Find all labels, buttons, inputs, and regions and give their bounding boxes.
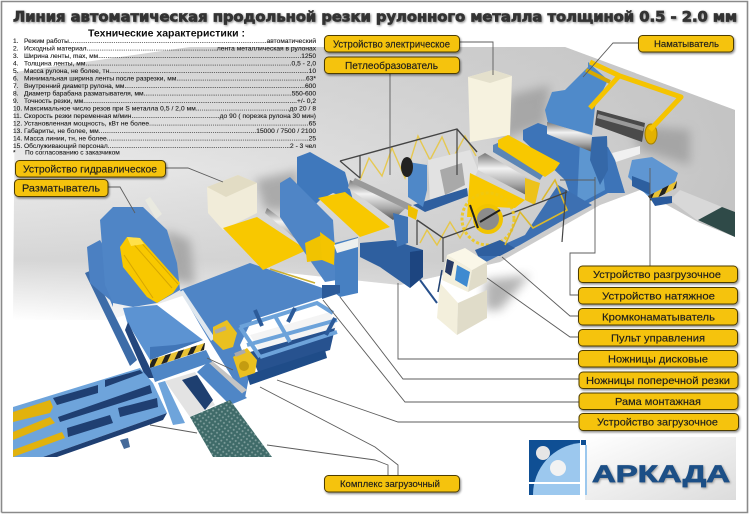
specifications table: 7. [13, 83, 19, 90]
specifications table: Внутренний диаметр рулона, мм..................................................................................................600 [24, 82, 316, 90]
label: unloading device: Устройство разгрузочное [593, 269, 721, 281]
label: cross-cut shears: Ножницы поперечной резки [586, 375, 730, 387]
label: decoiler: Разматыватель [22, 182, 101, 194]
transverse shears [207, 175, 358, 299]
label: disc shears: Ножницы дисковые [608, 354, 708, 366]
leader lines [108, 42, 650, 475]
edge scrap winder and rear slitter [462, 135, 592, 264]
floor shadows [165, 85, 690, 310]
specifications table: Масса линии, тн, не более...........................................................................................................25 [24, 134, 316, 142]
label: edge winder: Кромконаматыватель [602, 312, 716, 324]
specifications table: Максимальное число резов при S металла 0,5 / 2,0 мм.................................................до 20 / 8 [24, 106, 316, 112]
control console [420, 248, 487, 335]
label: recoiler: Наматыватель [654, 39, 719, 50]
floor [13, 47, 735, 320]
specifications table: 10. [13, 106, 22, 112]
label: control panel: Пульт управления [611, 332, 705, 344]
label: loading device [579, 414, 738, 430]
central blue decoiler post [401, 157, 468, 212]
title: Линия автоматическая продольной резки рулонного металла толщиной 0.5 - 2.0 мм [13, 8, 737, 26]
loading platform [123, 305, 247, 425]
label: electrical device: Устройство электрическое [333, 38, 450, 50]
blue floor platform [180, 263, 337, 401]
specifications table: Установленная мощность, кВт не более...................................................................................65 [24, 120, 316, 128]
specifications table: * [13, 150, 16, 156]
specifications table: 13. [13, 128, 22, 135]
specifications table: 1. [13, 38, 19, 45]
label: loading complex: Комплекс загрузочный [340, 479, 440, 490]
specifications table: 8. [13, 90, 19, 98]
label: hydraulic device: Устройство гидравлическое [23, 164, 157, 176]
specifications table: 4. [13, 60, 19, 68]
specifications table [13, 28, 317, 156]
chequer plate [190, 400, 272, 457]
label: edge winder [578, 308, 738, 325]
label: disc shears [578, 350, 738, 367]
label: loop former: Петлеобразователь [345, 60, 439, 72]
logo wordmark: АРКАДА [592, 461, 730, 488]
specifications table: 5. [13, 68, 19, 75]
specifications table: Толщина ленты, мм..............................................................................................................0,5 - 2,0 [24, 60, 316, 68]
label: unloading device [578, 266, 738, 282]
specifications table: 12. [13, 120, 22, 128]
label: control panel [578, 330, 738, 346]
specifications heading: Технические характеристики : [88, 28, 245, 40]
specifications table: Минимальная ширина ленты после разрезки, мм.....................................................................63* [24, 76, 316, 82]
label: tensioner: Устройство натяжное [602, 290, 715, 302]
specifications table: Диаметр барабана разматывателя, мм................................................................................550-600 [24, 90, 316, 98]
label: electrical device [324, 36, 460, 52]
specifications table: По согласованию с заказчиком [25, 150, 120, 156]
label: hydraulic device [16, 160, 166, 177]
label: decoiler [14, 180, 108, 196]
specifications table: Режим работы..........................................................................................................автоматический [24, 37, 316, 45]
conveyor rack [213, 303, 337, 385]
label: recoiler [638, 36, 734, 52]
unloading device [628, 157, 735, 237]
specifications table: Обслуживающий персонал..................................................................................................2 - 3 чел [24, 142, 316, 150]
specifications table: 9. [13, 98, 19, 105]
specifications table: Точность резки, мм...................................................................................................................+/- 0,2 [24, 98, 316, 105]
logo emblem [529, 440, 587, 495]
specifications table: Ширина ленты, max, мм..............................................................................................................1250 [24, 53, 316, 60]
specifications table: Габариты, не более, мм...................................................................................15000 / 7500 / 2100 [24, 127, 316, 135]
loading ramps [13, 368, 167, 457]
label: loop former [324, 57, 460, 74]
label: cross-cut shears [579, 372, 738, 388]
specifications table: Скорость резки переменная м/мин...............................................до 90 ( порезка рулона 30 мин) [24, 113, 316, 120]
label: mounting frame: Рама монтажная [615, 396, 701, 408]
specifications table: 11. [13, 113, 22, 120]
recoiler [523, 62, 681, 210]
specifications table: Масса рулона, не более, тн...........................................................................................................10 [24, 67, 316, 75]
label: loading device: Устройство загрузочное [597, 416, 718, 428]
specifications table: 2. [13, 46, 19, 52]
slitter: disc shears [297, 152, 423, 288]
label: mounting frame [579, 393, 738, 410]
loop frame front [417, 210, 520, 262]
specifications table: 3. [13, 53, 19, 60]
loop pit frame rear [340, 129, 478, 205]
specifications table: Исходный материал......................................................................лента металлическая в рулонах [24, 44, 317, 52]
label: loading complex [324, 476, 460, 492]
decoiler [85, 197, 180, 366]
specifications table: 14. [13, 136, 22, 142]
logo [529, 437, 736, 500]
label: tensioner [578, 288, 738, 304]
specifications table: 6. [13, 76, 19, 82]
electrical cabinet [468, 70, 512, 142]
specifications table: 15. [13, 143, 22, 150]
